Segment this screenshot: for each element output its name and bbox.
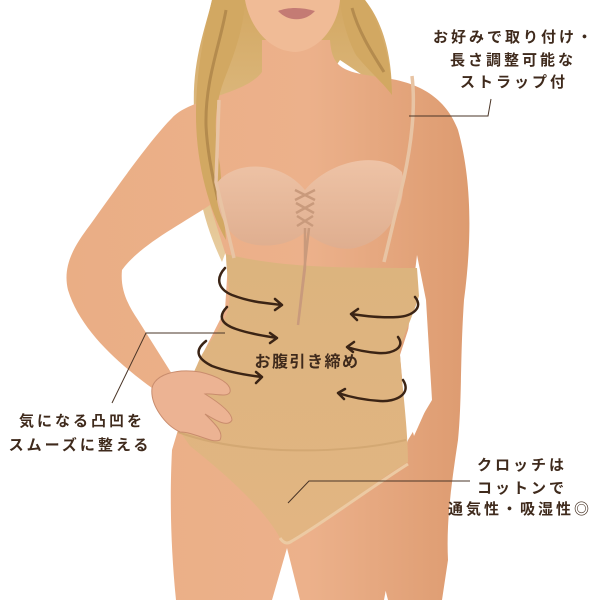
leader line: crotch <box>288 481 470 503</box>
lips <box>278 8 315 19</box>
text: straps: お好みで取り付け・ <box>433 29 595 46</box>
text: crotch: 通気性・吸湿性◎ <box>448 500 592 518</box>
leg opening edge <box>280 464 408 543</box>
figure: model wearing shapewear <box>67 0 469 600</box>
text: smoothing: スムーズに整える <box>9 436 151 454</box>
callout: adjustable straps <box>409 29 595 116</box>
arrow: left upper <box>219 268 282 310</box>
shapewear garment <box>172 254 419 543</box>
bra <box>216 160 403 249</box>
body skin <box>67 40 469 600</box>
text: smoothing: 気になる凸凹を <box>19 412 145 430</box>
leader line: straps <box>409 99 491 116</box>
callout: crotch <box>288 457 592 518</box>
arrow: right upper <box>351 297 418 320</box>
text: crotch: コットンで <box>477 480 567 497</box>
hair front <box>196 0 392 240</box>
shapewear waistband seam <box>178 432 406 450</box>
compression arrows <box>199 268 418 401</box>
bra lacing <box>295 190 315 325</box>
text: crotch: クロッチは <box>477 457 567 474</box>
straps <box>216 76 413 262</box>
tummy tightening label: お腹引き締め <box>254 352 360 371</box>
hair highlight strands <box>206 8 384 200</box>
arrow: left middle <box>222 307 277 343</box>
hair back <box>194 0 392 262</box>
hand on hip <box>152 371 232 441</box>
arrow: right lower <box>338 380 406 401</box>
white gap between torso and right arm <box>400 296 431 436</box>
leader line: smoothing <box>112 333 225 403</box>
face and neck <box>245 0 340 52</box>
callout: smoothing <box>9 333 225 454</box>
text: straps: ストラップ付 <box>460 74 568 91</box>
arrow: left lower <box>199 341 262 383</box>
text: straps: 長さ調整可能な <box>450 51 576 69</box>
arrow: right middle <box>347 337 400 353</box>
